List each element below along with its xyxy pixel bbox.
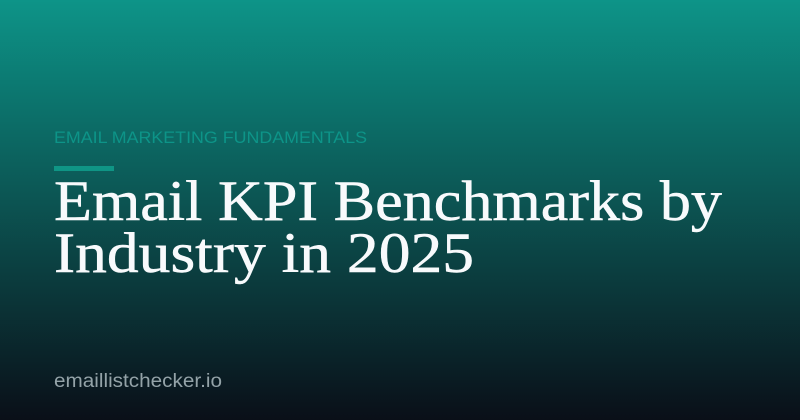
site URL: emaillistchecker.io [54,371,222,392]
title line 1: Email KPI Benchmarks by [54,170,723,233]
eyebrow label: EMAIL MARKETING FUNDAMENTALS [54,128,367,147]
title line 2: Industry in 2025 [54,222,474,285]
accent bar [54,166,114,171]
title [54,170,723,285]
